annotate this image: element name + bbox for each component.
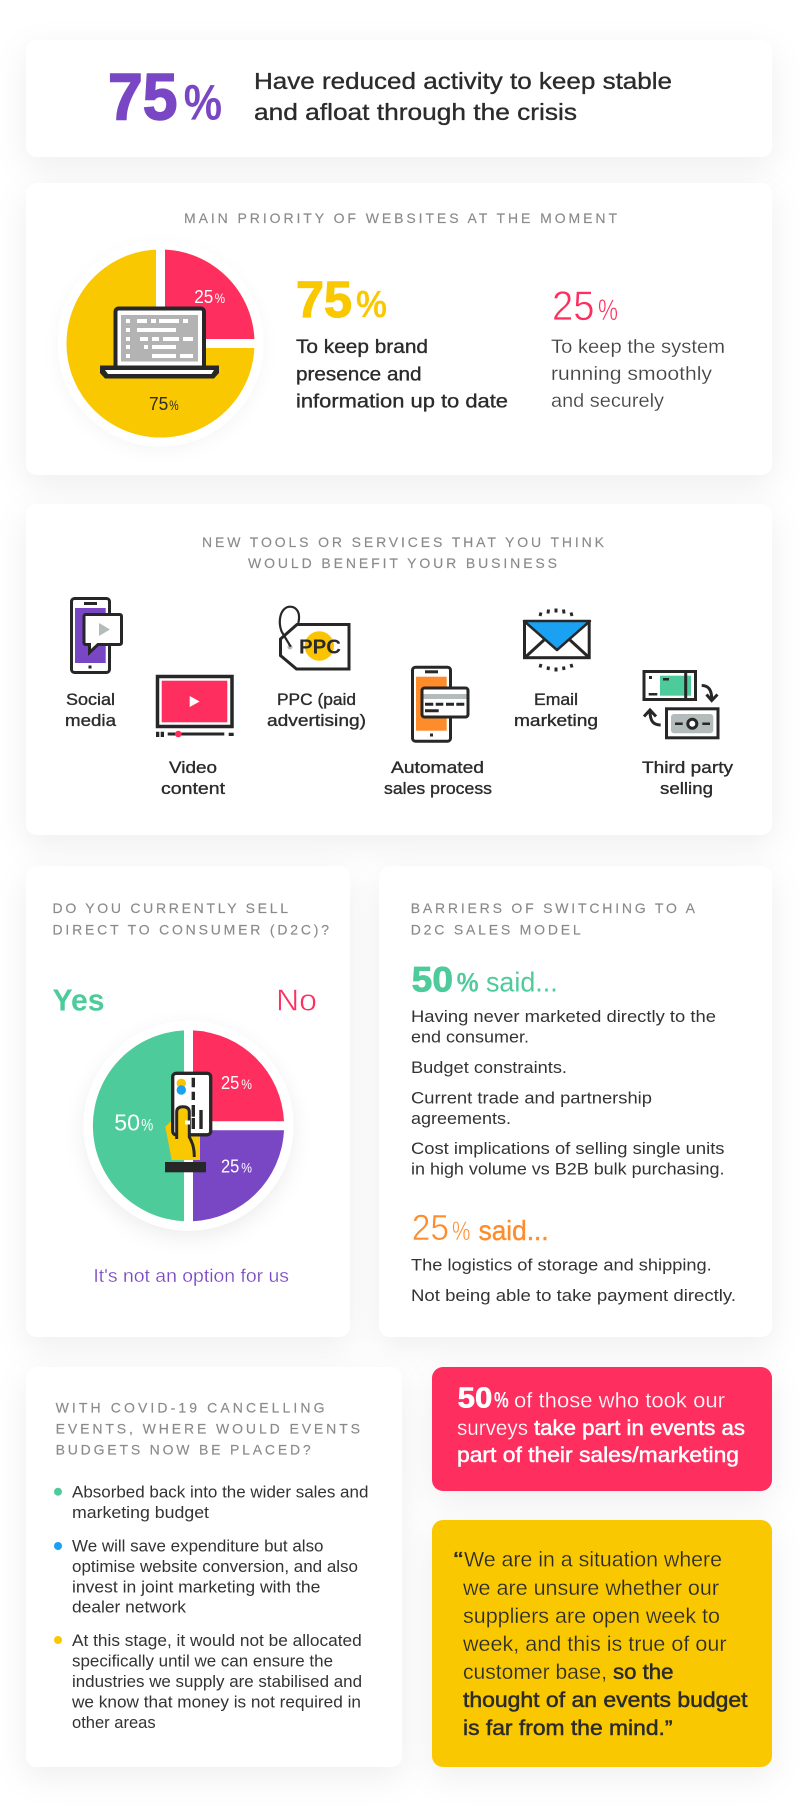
bullet: not allocated bbox=[54, 1631, 362, 1732]
list: 50% barriers: agreements. bbox=[411, 1109, 511, 1128]
panel: D2C question bbox=[26, 866, 350, 1337]
heading: WITH COVID-19 CANCELLING bbox=[56, 1400, 324, 1416]
stat: 50% said: % bbox=[457, 967, 479, 997]
heading: D2C SALES MODEL bbox=[411, 922, 581, 938]
label: automated sales process: sales process bbox=[384, 779, 492, 798]
label 50%: 50 bbox=[114, 1110, 140, 1136]
bullet: save expenditure: We will save expenditure but also bbox=[72, 1537, 324, 1556]
label 25% top: 25 bbox=[221, 1073, 239, 1093]
icon: social media phone bbox=[72, 598, 122, 672]
label: automated sales process bbox=[384, 758, 492, 798]
stat 50%: % bbox=[494, 1387, 509, 1412]
stat: 75% brand presence: % bbox=[356, 284, 387, 326]
panel: barriers of switching to D2C bbox=[379, 866, 772, 1337]
icon: hand and card bbox=[165, 1073, 211, 1172]
label 25% top bbox=[221, 1073, 252, 1093]
icon: automated sales phone bbox=[412, 667, 468, 741]
heading bbox=[411, 900, 696, 938]
label: yes: Yes bbox=[52, 983, 104, 1018]
stat: 50% said: said... bbox=[486, 966, 558, 997]
caption: It's not an option for us bbox=[93, 1265, 289, 1286]
stat: 25% system running: To keep the system bbox=[551, 336, 725, 358]
icon: PPC tag: PPC bbox=[299, 636, 341, 658]
label 25% top: % bbox=[241, 1076, 252, 1092]
label: social media bbox=[65, 690, 117, 730]
heading: DO YOU CURRENTLY SELL bbox=[52, 900, 288, 916]
panel: main priority of websites bbox=[26, 183, 772, 475]
panel: 50% callout bbox=[432, 1367, 772, 1491]
stat: 25% said: said... bbox=[479, 1215, 549, 1246]
icon: PPC tag bbox=[280, 607, 349, 669]
stat: 50% said bbox=[412, 960, 558, 999]
label: third party selling: Third party bbox=[642, 758, 734, 777]
stat: 75% brand presence: 75 bbox=[296, 271, 352, 328]
quote text: “ bbox=[454, 1549, 463, 1572]
label 50%: % bbox=[141, 1116, 153, 1135]
label: email marketing: Email bbox=[534, 690, 578, 709]
callout text bbox=[457, 1388, 745, 1467]
bullet: not allocated: other areas bbox=[72, 1713, 156, 1732]
list: 50% barriers bbox=[411, 1007, 724, 1178]
label: PPC bbox=[267, 690, 366, 730]
heading: DIRECT TO CONSUMER (D2C)? bbox=[52, 922, 329, 938]
label: no: No bbox=[276, 983, 317, 1018]
list: 50% barriers: in high volume vs B2B bulk purchasing. bbox=[411, 1159, 724, 1178]
panel: events budgets bbox=[26, 1367, 402, 1767]
bullet: absorbed: Absorbed back into the wider sales and bbox=[72, 1483, 368, 1502]
list: 50% barriers: Budget constraints. bbox=[411, 1058, 567, 1077]
label: third party selling: selling bbox=[660, 779, 713, 798]
quote text: thought of an events budget bbox=[463, 1688, 748, 1712]
label 75% bbox=[149, 394, 179, 414]
bullet: save expenditure bbox=[54, 1537, 358, 1617]
list: 50% barriers: Cost implications of selling single units bbox=[411, 1139, 724, 1158]
big stat 75%: % bbox=[184, 74, 222, 130]
stat: 25% system running bbox=[551, 282, 725, 412]
stat: 25% said: % bbox=[452, 1216, 470, 1246]
quote text: is far from the mind.” bbox=[463, 1716, 672, 1740]
stat 50%: 50 bbox=[458, 1382, 492, 1414]
label: PPC: PPC (paid bbox=[277, 690, 356, 709]
panel: reduced activity stat bbox=[26, 40, 772, 157]
list: 25% barriers: Not being able to take payment directly. bbox=[411, 1286, 736, 1305]
stat: 75% brand presence: information up to date bbox=[296, 390, 508, 412]
pie chart: 75/25 bbox=[58, 240, 264, 446]
quote text bbox=[454, 1548, 748, 1740]
label: social media: Social bbox=[66, 690, 115, 709]
label: email marketing: marketing bbox=[514, 711, 598, 730]
stat: 75% brand presence: To keep brand bbox=[296, 336, 428, 358]
callout text: of those who took our bbox=[514, 1388, 725, 1412]
bullet: save expenditure: dealer network bbox=[72, 1598, 186, 1617]
statement text: and afloat through the crisis bbox=[254, 99, 577, 125]
label: video content: content bbox=[161, 779, 225, 798]
statement text bbox=[254, 68, 672, 125]
quote text: week, and this is true of our bbox=[462, 1632, 726, 1656]
heading: BARRIERS OF SWITCHING TO A bbox=[411, 900, 696, 916]
heading bbox=[202, 534, 605, 571]
stat: 25% said: 25 bbox=[412, 1207, 449, 1248]
stat: 25% system running: running smoothly bbox=[551, 363, 712, 385]
stat 50% bbox=[458, 1382, 509, 1414]
bullet: absorbed bbox=[54, 1483, 368, 1522]
bullet: not allocated: specifically until we can ensure the bbox=[72, 1652, 333, 1671]
quote text: so the bbox=[613, 1660, 674, 1684]
heading bbox=[52, 900, 329, 938]
bullet: absorbed: marketing budget bbox=[72, 1503, 209, 1522]
stat: 25% system running: % bbox=[598, 294, 618, 327]
bullet: save expenditure: invest in joint marketing with the bbox=[72, 1577, 320, 1596]
quote text: customer base, bbox=[463, 1660, 607, 1684]
stat: 25% system running: 25 bbox=[552, 282, 594, 329]
list: 25% barriers bbox=[411, 1256, 736, 1305]
stat: 75% brand presence: presence and bbox=[296, 364, 422, 386]
stat: 75% brand presence bbox=[296, 271, 508, 412]
quote text: We are in a situation where bbox=[464, 1548, 722, 1572]
label 50% bbox=[114, 1110, 153, 1136]
panel: quote bbox=[432, 1520, 772, 1767]
heading bbox=[56, 1400, 360, 1458]
label: third party selling bbox=[642, 758, 734, 798]
bullet: save expenditure: optimise website conversion, and also bbox=[72, 1557, 358, 1576]
label 25% bottom: 25 bbox=[221, 1157, 239, 1177]
panel: new tools or services bbox=[26, 504, 772, 835]
bullet: not allocated: At this stage, it would not be allocated bbox=[72, 1631, 362, 1650]
label: video content bbox=[161, 758, 225, 798]
label 25%: % bbox=[215, 290, 225, 306]
label: social media: media bbox=[65, 711, 117, 730]
big stat 75%: 75 bbox=[108, 60, 178, 134]
list: 50% barriers: Having never marketed directly to the bbox=[411, 1007, 716, 1026]
icon: email envelope bbox=[524, 608, 590, 672]
quote text: we are unsure whether our bbox=[462, 1576, 719, 1600]
heading: MAIN PRIORITY OF WEBSITES AT THE MOMENT bbox=[184, 210, 617, 226]
statement text: Have reduced activity to keep stable bbox=[254, 68, 672, 94]
heading: BUDGETS NOW BE PLACED? bbox=[56, 1442, 311, 1458]
icon: laptop bbox=[100, 308, 219, 378]
heading: WOULD BENEFIT YOUR BUSINESS bbox=[248, 555, 557, 571]
label 25%: 25 bbox=[194, 287, 213, 307]
list: 50% barriers: Current trade and partnership bbox=[411, 1088, 652, 1107]
label: email marketing bbox=[514, 690, 598, 730]
label 25% bottom bbox=[221, 1157, 252, 1177]
label 75%: 75 bbox=[149, 394, 168, 414]
label 25% bbox=[194, 287, 225, 307]
pie chart: D2C bbox=[84, 1021, 294, 1231]
callout text: part of their sales/marketing bbox=[457, 1443, 739, 1467]
callout text: take part in events as bbox=[534, 1416, 745, 1440]
label 25% bottom: % bbox=[241, 1160, 252, 1176]
list: 25% barriers: The logistics of storage and shipping. bbox=[411, 1256, 712, 1275]
label: automated sales process: Automated bbox=[391, 758, 484, 777]
list: 50% barriers: end consumer. bbox=[411, 1028, 529, 1047]
bullet: not allocated: industries we supply are stabilised and bbox=[72, 1672, 362, 1691]
label 75%: % bbox=[169, 397, 179, 413]
label: PPC: advertising) bbox=[267, 711, 366, 730]
stat: 25% system running: and securely bbox=[551, 390, 664, 412]
big stat 75% bbox=[108, 60, 222, 134]
label: video content: Video bbox=[169, 758, 217, 777]
quote text: suppliers are open week to bbox=[463, 1604, 720, 1628]
icon: video content bbox=[156, 676, 234, 737]
icon: third party selling bbox=[644, 671, 718, 738]
heading: NEW TOOLS OR SERVICES THAT YOU THINK bbox=[202, 534, 605, 550]
stat: 50% said: 50 bbox=[412, 960, 453, 999]
heading: EVENTS, WHERE WOULD EVENTS bbox=[56, 1421, 360, 1437]
callout text: surveys bbox=[457, 1416, 528, 1440]
stat: 25% said bbox=[412, 1207, 549, 1248]
bullet: not allocated: we know that money is not required in bbox=[71, 1692, 361, 1711]
